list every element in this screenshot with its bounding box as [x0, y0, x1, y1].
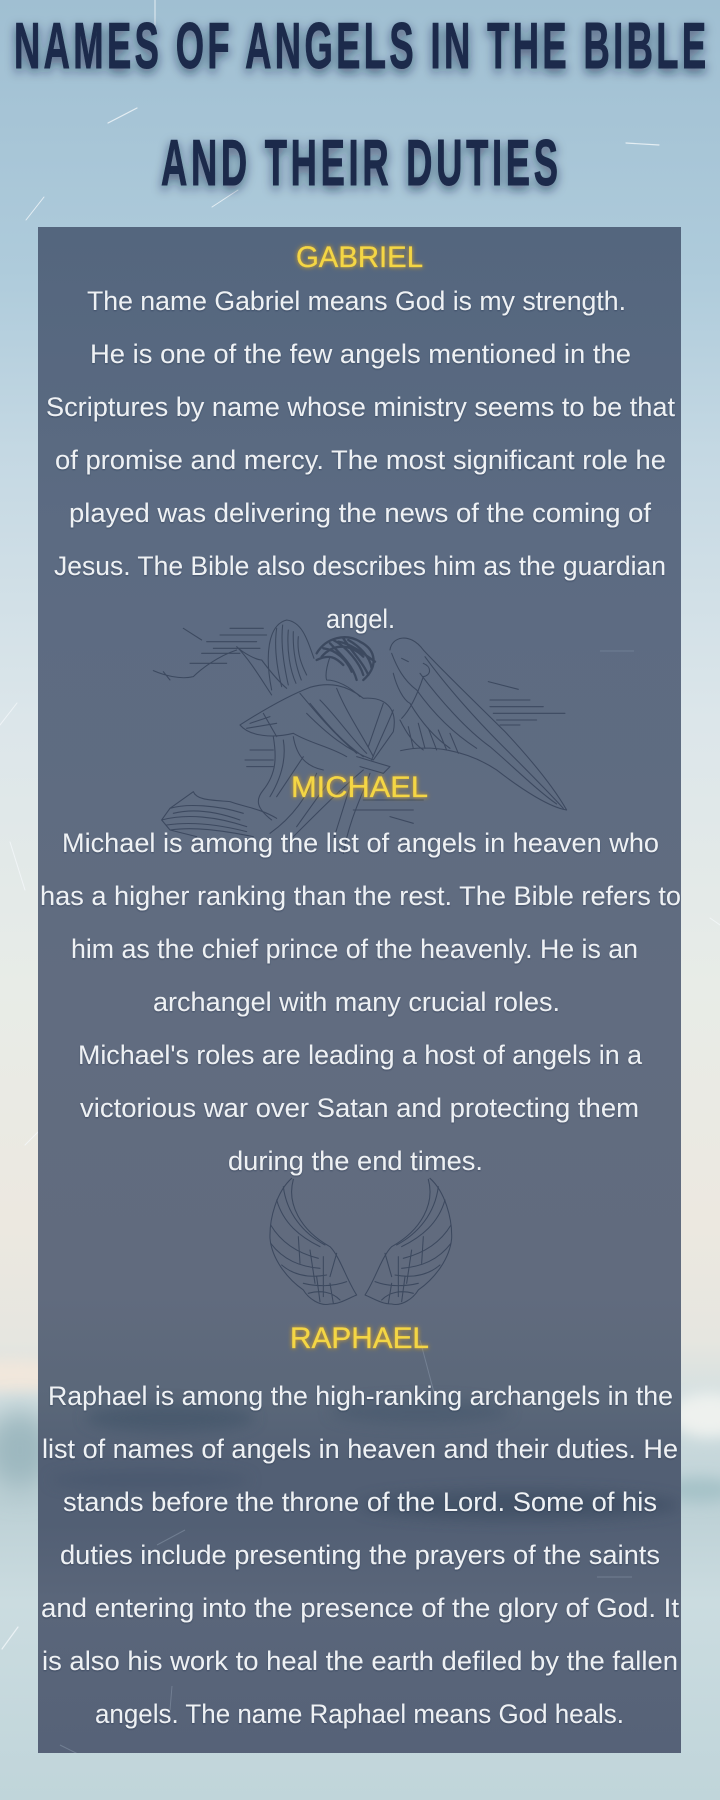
section: Gabriel	[46, 241, 675, 634]
text block: Raphael description: angels. The name Raphael means God heals.	[95, 1699, 624, 1729]
section: Raphael	[41, 1322, 680, 1729]
skirt and legs	[258, 737, 370, 853]
text block: Michael description: him as the chief prince of the heavenly. He is an	[71, 934, 638, 964]
text block: Gabriel description: He is one of the few angels mentioned in the	[90, 339, 631, 369]
text block: Raphael description: is also his work to heal the earth defiled by the fallen	[42, 1646, 678, 1676]
foot cloud	[162, 792, 277, 837]
text block: Gabriel description: angel.	[326, 604, 395, 634]
text block: Gabriel description: Jesus. The Bible also describes him as the guardian	[54, 551, 666, 581]
title	[14, 10, 706, 200]
text block: Gabriel description: The name Gabriel means God is my strength.	[87, 286, 626, 316]
text block: Michael description: Michael's roles are leading a host of angels in a	[78, 1040, 643, 1070]
right wing	[390, 638, 567, 810]
text block: Gabriel description	[46, 286, 675, 634]
text block: Michael description	[40, 828, 681, 1176]
text block: Michael description: during the end times.	[228, 1146, 483, 1176]
text block: Raphael description: and entering into the presence of the glory of God. It	[41, 1593, 680, 1623]
text block: Raphael description: stands before the throne of the Lord. Some of his	[63, 1487, 657, 1517]
heading: Raphael: RAPHAEL	[290, 1322, 429, 1355]
left wing	[270, 1178, 357, 1304]
text block: Gabriel description: played was delivering the news of the coming of	[69, 498, 652, 528]
left wing	[268, 620, 314, 690]
heading: Michael: MICHAEL	[291, 771, 428, 804]
robe	[240, 685, 394, 773]
text block: Michael description: archangel with many crucial roles.	[153, 987, 560, 1017]
text block: Raphael description	[41, 1381, 680, 1729]
icon: angel line drawing	[153, 620, 567, 853]
right wing	[365, 1178, 452, 1304]
section: Michael	[40, 771, 681, 1176]
text block: Raphael description: duties include presenting the prayers of the saints	[60, 1540, 660, 1570]
text block: Raphael description: list of names of angels in heaven and their duties. He	[42, 1434, 678, 1464]
title: AND THEIR DUTIES	[161, 127, 558, 200]
icon: pair of wings	[270, 1178, 452, 1304]
title: NAMES OF ANGELS IN THE BIBLE	[14, 10, 706, 83]
text block: Michael description: Michael is among the list of angels in heaven who	[62, 828, 659, 858]
text block: Raphael description: Raphael is among the high-ranking archangels in the	[48, 1381, 673, 1411]
text block: Gabriel description: Scriptures by name whose ministry seems to be that	[46, 392, 675, 422]
text block: Gabriel description: of promise and mercy. The most significant role he	[55, 445, 666, 475]
face and arms	[237, 647, 430, 718]
heading: Gabriel: GABRIEL	[296, 241, 423, 274]
text block: Michael description: has a higher ranking than the rest. The Bible refers to	[40, 881, 681, 911]
hair	[317, 637, 375, 680]
text block: Michael description: victorious war over Satan and protecting them	[80, 1093, 639, 1123]
panel: translucent text card	[38, 227, 681, 1760]
hatching	[153, 628, 565, 823]
